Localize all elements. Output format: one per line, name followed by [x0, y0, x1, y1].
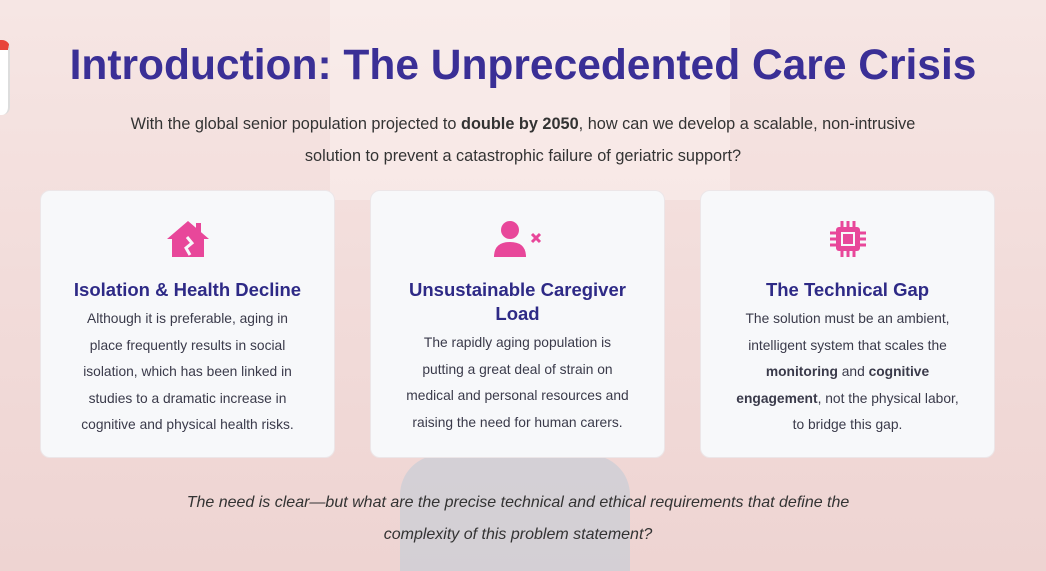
subtitle: solution to prevent a catastrophic failure of geriatric support?	[305, 147, 741, 165]
panel: technical gap: intelligent system that scales the	[748, 338, 947, 352]
panel: technical gap: The solution must be an ambient,	[745, 311, 950, 326]
panel: caregiver load: The rapidly aging population is	[424, 335, 611, 350]
panel: technical gap: The Technical Gap	[766, 279, 929, 300]
panel: caregiver load: Unsustainable Caregiver	[409, 279, 626, 300]
panel: technical gap: to bridge this gap.	[793, 417, 902, 432]
icon: chip	[830, 221, 866, 257]
panel: isolation: isolation, which has been linked in	[83, 364, 292, 379]
panel: isolation	[40, 190, 335, 458]
closing question: complexity of this problem statement?	[384, 526, 652, 543]
subtitle: With the global senior population projected to double by 2050, how can we develop a scalable, non-intrusive	[131, 115, 915, 133]
panel: isolation: Isolation & Health Decline	[74, 279, 301, 300]
subtitle	[130, 115, 915, 165]
closing question: The need is clear—but what are the precise technical and ethical requirements that define the	[187, 494, 849, 511]
icon: broken house	[167, 221, 209, 257]
panel: caregiver load: Load	[495, 303, 540, 324]
panel: isolation: place frequently results in social	[90, 338, 285, 352]
icon: person x	[494, 221, 541, 257]
title: Introduction: The Unprecedented Care Crisis	[70, 42, 976, 89]
closing question	[187, 494, 849, 543]
panel: caregiver load: medical and personal resources and	[406, 388, 629, 403]
panel: technical gap: monitoring and cognitive	[766, 364, 929, 379]
panel: isolation: studies to a dramatic increase in	[89, 390, 286, 406]
panel: caregiver load: putting a great deal of strain on	[422, 362, 613, 376]
panel: isolation: cognitive and physical health risks.	[81, 417, 294, 432]
panel: caregiver load: raising the need for human carers.	[412, 414, 623, 430]
panel: technical gap: engagement, not the physical labor,	[736, 390, 959, 406]
panel: isolation: Although it is preferable, aging in	[87, 311, 288, 326]
panel: technical gap	[700, 190, 995, 458]
panel: caregiver load	[370, 190, 665, 458]
